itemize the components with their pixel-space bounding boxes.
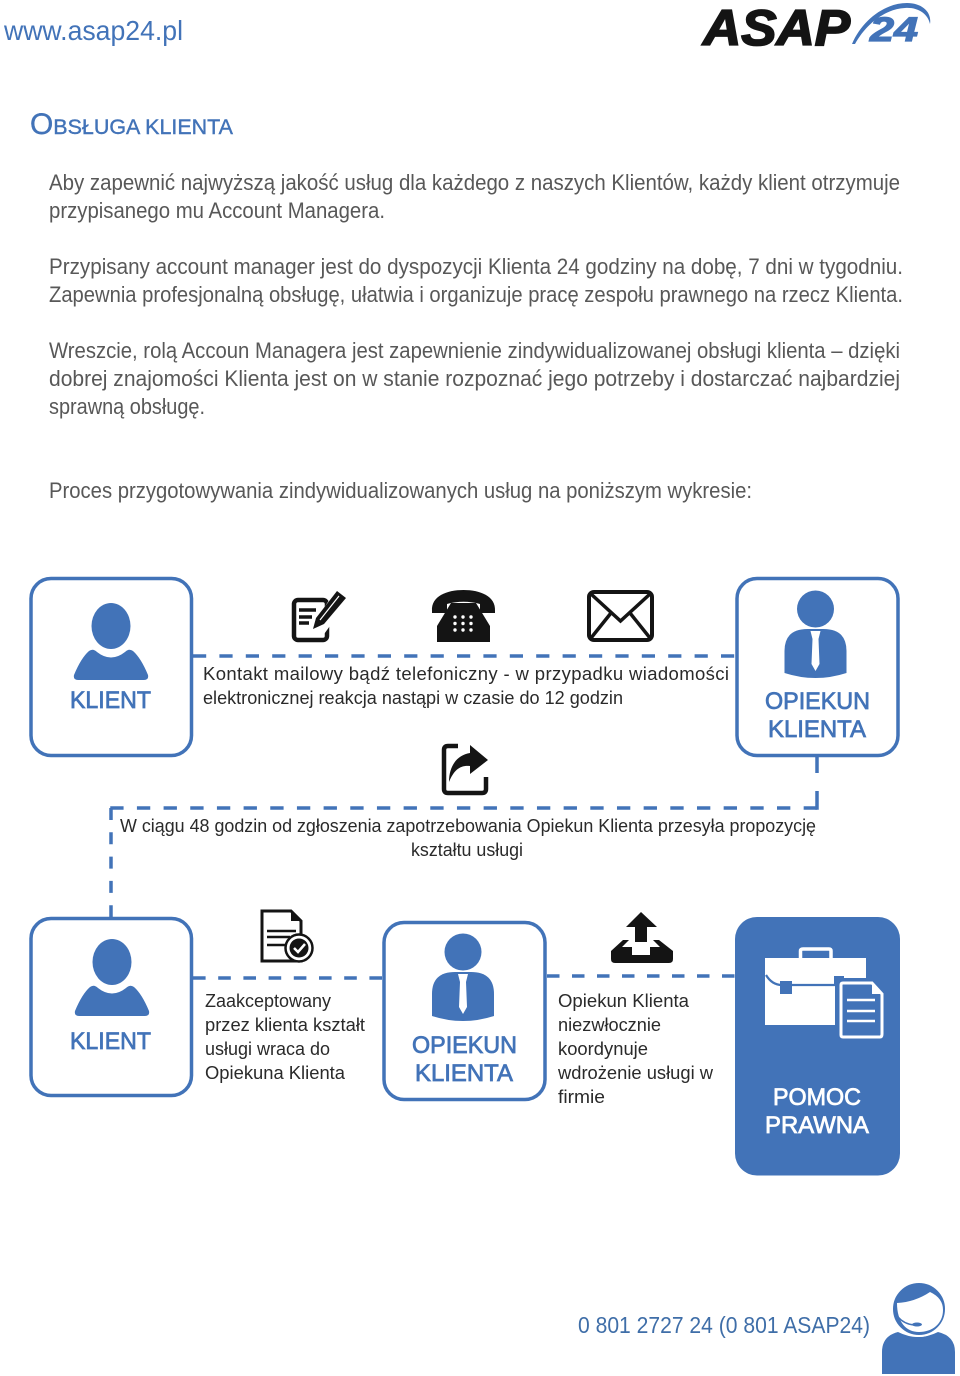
icon: call centre agent xyxy=(882,1282,955,1374)
label: pomoc prawna: PRAWNA xyxy=(765,1112,869,1139)
panel: opiekun klienta, first row xyxy=(737,578,898,756)
label: pomoc prawna: POMOC xyxy=(773,1084,861,1111)
icon: briefcase with document xyxy=(765,949,882,1037)
text block: intro paragraph 1: przypisanego mu Account Managera. xyxy=(49,198,385,223)
connector: klient to opiekun xyxy=(193,654,735,658)
logo: ASAP24: 24 xyxy=(869,11,918,49)
label: opiekun klienta: KLIENTA xyxy=(768,716,866,743)
icon: share arrow xyxy=(444,745,488,793)
heading: OBSŁUGA KLIENTA xyxy=(30,108,234,141)
connector: opiekun to pomoc prawna xyxy=(547,974,735,978)
text block: implementation: wdrożenie usługi w xyxy=(557,1062,714,1083)
label: opiekun klienta: OPIEKUN xyxy=(765,688,870,715)
text block: 48 hour proposal xyxy=(120,815,816,860)
label: opiekun klienta: OPIEKUN xyxy=(412,1032,517,1059)
label: opiekun klienta: KLIENTA xyxy=(415,1060,513,1087)
text block: accepted proposal: Opiekuna Klienta xyxy=(205,1062,346,1083)
panel: klient, first row xyxy=(31,578,192,756)
text block: intro paragraph 2: Przypisany account manager jest do dyspozycji Klienta 24 godziny na dobę, 7 dni w tygodniu. xyxy=(49,254,903,279)
text block: contact description xyxy=(203,663,729,708)
text block: accepted proposal: przez klienta kształt xyxy=(205,1014,365,1035)
text block: accepted proposal: Zaakceptowany xyxy=(205,990,332,1011)
panel: klient, second row xyxy=(31,918,192,1096)
label: klient: KLIENT xyxy=(70,1028,151,1055)
text block: intro paragraph 3 xyxy=(49,338,900,419)
icon: account manager person xyxy=(432,934,494,1021)
icon: note and pencil xyxy=(294,589,350,640)
text block: implementation: firmie xyxy=(558,1086,605,1107)
text block: accepted proposal: usługi wraca do xyxy=(205,1038,330,1059)
label: opiekun klienta xyxy=(412,1032,517,1087)
phone number: 0 801 2727 24 (0 801 ASAP24) xyxy=(578,1312,870,1338)
text block: intro paragraph 3: Wreszcie, rolą Accoun Managera jest zapewnienie zindywidualizowanej obsługi klienta – dzięki xyxy=(49,338,900,363)
text block: intro paragraph 1: Aby zapewnić najwyższą jakość usług dla każdego z naszych Klientów, każdy klient otrzymuje xyxy=(49,170,900,195)
text block: intro paragraph 3: sprawną obsługę. xyxy=(49,394,205,419)
connector: horizontal route to second row xyxy=(110,806,817,810)
icon: client person xyxy=(75,939,149,1016)
text block: accepted proposal xyxy=(205,990,365,1083)
text block: process intro: Proces przygotowywania zindywidualizowanych usług na poniższym wykresie: xyxy=(49,478,752,503)
icon: envelope xyxy=(589,592,652,640)
text block: intro paragraph 1 xyxy=(49,170,900,223)
text block: implementation: niezwłocznie xyxy=(558,1014,661,1035)
icon: client person xyxy=(74,603,148,680)
label: pomoc prawna xyxy=(765,1084,869,1139)
icon: upload tray xyxy=(611,912,673,963)
logo: ASAP24 xyxy=(701,0,930,56)
text block: contact description: Kontakt mailowy bądź telefoniczny - w przypadku wiadomości xyxy=(203,663,729,684)
icon: account manager person xyxy=(784,590,846,678)
text block: contact description: elektronicznej reakcja nastąpi w czasie do 12 godzin xyxy=(203,687,623,708)
panel: opiekun klienta, second row xyxy=(384,922,545,1100)
text block: implementation: koordynuje xyxy=(558,1038,648,1059)
label: klient: KLIENT xyxy=(70,687,151,714)
connector: klient to opiekun, second row xyxy=(193,976,382,980)
icon: telephone xyxy=(432,590,495,642)
logo: ASAP24: ASAP xyxy=(701,0,851,56)
connector: vertical route to second row xyxy=(109,808,113,917)
connector: opiekun down, upper stub xyxy=(815,757,819,810)
text block: intro paragraph 2 xyxy=(49,254,903,307)
panel: pomoc prawna xyxy=(735,917,900,1176)
website address: www.asap24.pl xyxy=(3,15,183,46)
text block: 48 hour proposal: kształtu usługi xyxy=(411,839,523,860)
text block: implementation xyxy=(557,990,714,1107)
icon: document with check mark xyxy=(262,911,312,962)
text block: 48 hour proposal: W ciągu 48 godzin od zgłoszenia zapotrzebowania Opiekun Klienta przesyła propozycję xyxy=(120,815,816,836)
label: opiekun klienta xyxy=(765,688,870,743)
text block: intro paragraph 2: Zapewnia profesjonalną obsługę, ułatwia i organizuje pracę zespołu prawnego na rzecz Klienta. xyxy=(49,282,903,307)
text block: intro paragraph 3: dobrej znajomości Klienta jest on w stanie rozpoznać jego potrzeby i dostarczać najbardziej xyxy=(49,366,900,391)
text block: implementation: Opiekun Klienta xyxy=(558,990,690,1011)
